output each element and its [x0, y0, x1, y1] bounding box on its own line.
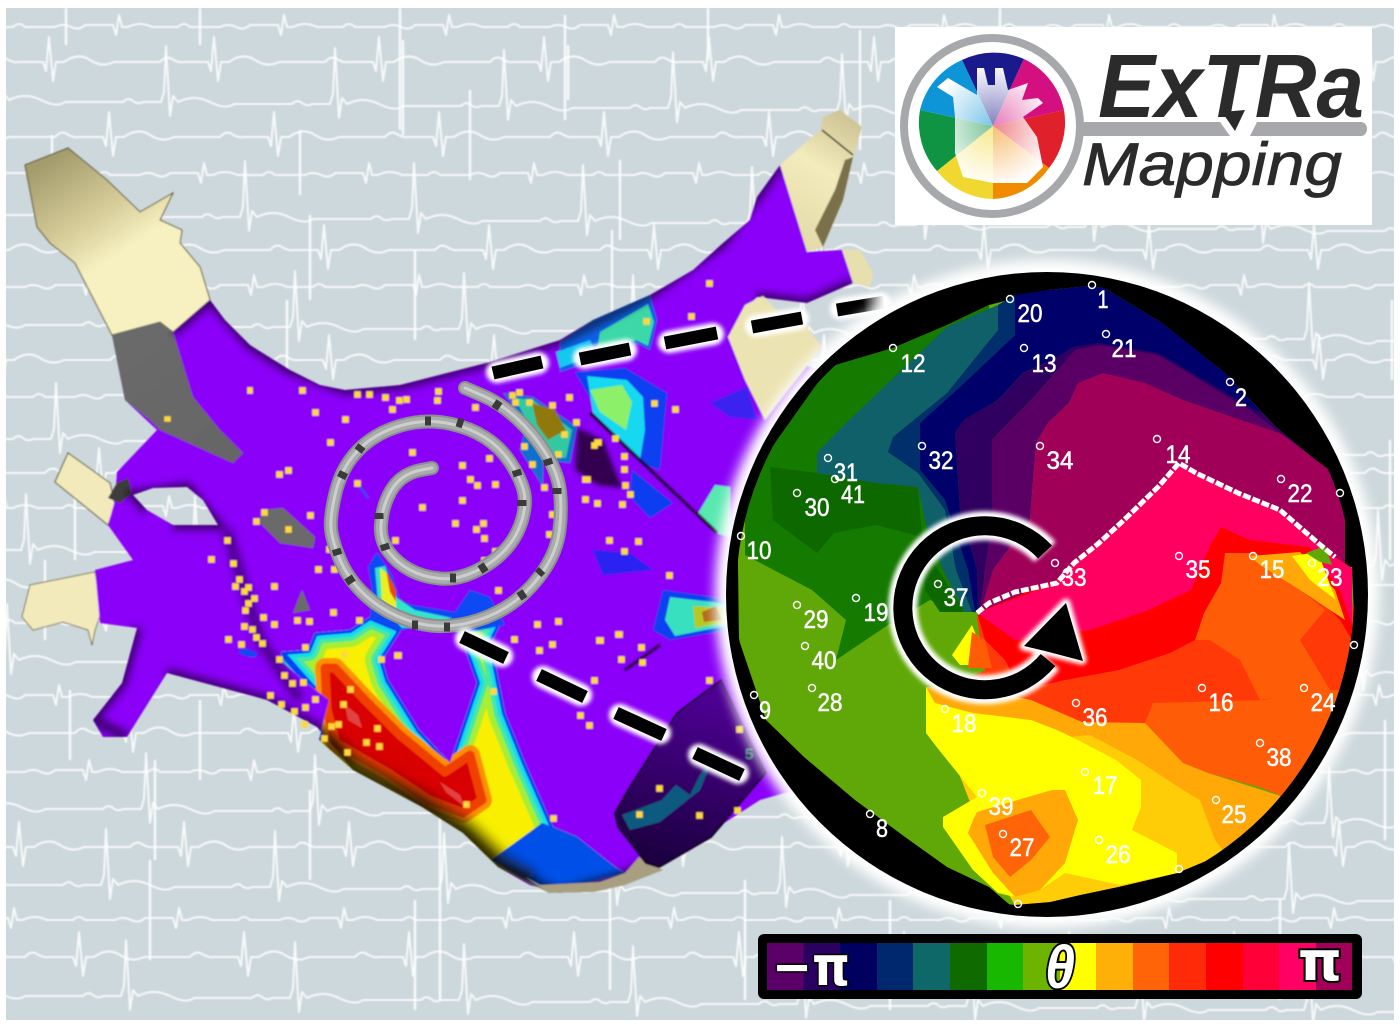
logo magnifier wheel: [904, 38, 1080, 214]
magnified phase map circle: [715, 260, 1379, 928]
electrode numbers: 10: [746, 537, 772, 565]
tan base bottom: [525, 857, 663, 893]
pulmonary vein left middle: [55, 453, 115, 525]
electrode numbers: 34: [1046, 447, 1074, 475]
theta label: θ: [1045, 934, 1075, 1001]
atrium body: [93, 165, 900, 893]
mapping points: [165, 281, 742, 821]
logo word Mapping: Mapping: [1082, 131, 1342, 198]
electrode numbers: 8: [876, 815, 888, 843]
spiral mapping catheter: [331, 388, 561, 627]
rotation arrow: [903, 526, 1083, 690]
electrode numbers: 18: [952, 710, 976, 738]
electrode numbers: 2: [1235, 384, 1247, 412]
dark edge shading: [93, 165, 853, 893]
electrode numbers: 14: [1166, 441, 1191, 469]
left atrium 3D map: [22, 110, 900, 900]
main rainbow low-voltage area: [270, 610, 630, 900]
electrode numbers: 32: [928, 447, 954, 475]
dark coronary patch: [615, 680, 766, 867]
electrode numbers: 13: [1032, 350, 1056, 378]
electrode numbers: 26: [1106, 841, 1130, 869]
dashed zoom lines: [462, 302, 885, 775]
electrode numbers: 40: [812, 647, 836, 675]
pulmonary vein upper right: [780, 110, 862, 252]
pulmonary vein upper left: [25, 148, 210, 335]
electrode numbers: 30: [804, 494, 830, 522]
electrode numbers: 17: [1092, 772, 1118, 800]
electrode numbers: 27: [1010, 834, 1034, 862]
electrode numbers: 35: [1186, 556, 1210, 584]
electrode numbers: 16: [1208, 689, 1234, 717]
electrode numbers: 39: [988, 793, 1014, 821]
electrode numbers: 29: [804, 606, 828, 634]
electrode numbers: 25: [1222, 801, 1246, 829]
colour scale bar: [758, 930, 1362, 1001]
tan vein lobe behind dashes: [728, 296, 822, 420]
pulmonary vein branch right: [840, 250, 873, 287]
electrode numbers: 37: [944, 584, 968, 612]
electrode numbers: 23: [1318, 564, 1342, 592]
electrode numbers: 22: [1288, 480, 1312, 508]
logo word ExTRa: ExTRa: [1098, 37, 1364, 137]
black frame: [726, 272, 1368, 917]
logo bar: [1083, 110, 1367, 136]
electrode numbers: 33: [1062, 564, 1086, 592]
electrode numbers: 19: [864, 599, 888, 627]
electrode numbers: 21: [1112, 335, 1136, 363]
phase contour map: [737, 285, 1358, 905]
logo panel: [895, 27, 1372, 225]
electrode numbers: 12: [900, 350, 926, 378]
electrode numbers: 36: [1082, 704, 1108, 732]
pi label: π: [1298, 930, 1342, 993]
electrode numbers: 28: [818, 689, 842, 717]
electrode numbers: 9: [759, 697, 771, 725]
minus pi label: −π: [772, 935, 850, 998]
electrode numbers: [738, 282, 1358, 908]
electrode numbers: 24: [1310, 689, 1336, 717]
grey scar regions: [108, 322, 315, 613]
electrode numbers: 15: [1260, 556, 1284, 584]
electrode numbers: 31: [834, 459, 858, 487]
electrode numbers: 20: [1018, 300, 1042, 328]
electrode numbers: 38: [1266, 744, 1292, 772]
pulmonary vein left lower: [22, 572, 102, 645]
electrode numbers: 41: [841, 481, 865, 509]
dark coronary patch: 5: [745, 746, 753, 763]
electrode numbers: 1: [1098, 286, 1108, 314]
glow ring: [715, 260, 1379, 928]
neck of low-voltage area under spiral: [368, 552, 505, 632]
voltage patches upper right: [503, 295, 757, 640]
